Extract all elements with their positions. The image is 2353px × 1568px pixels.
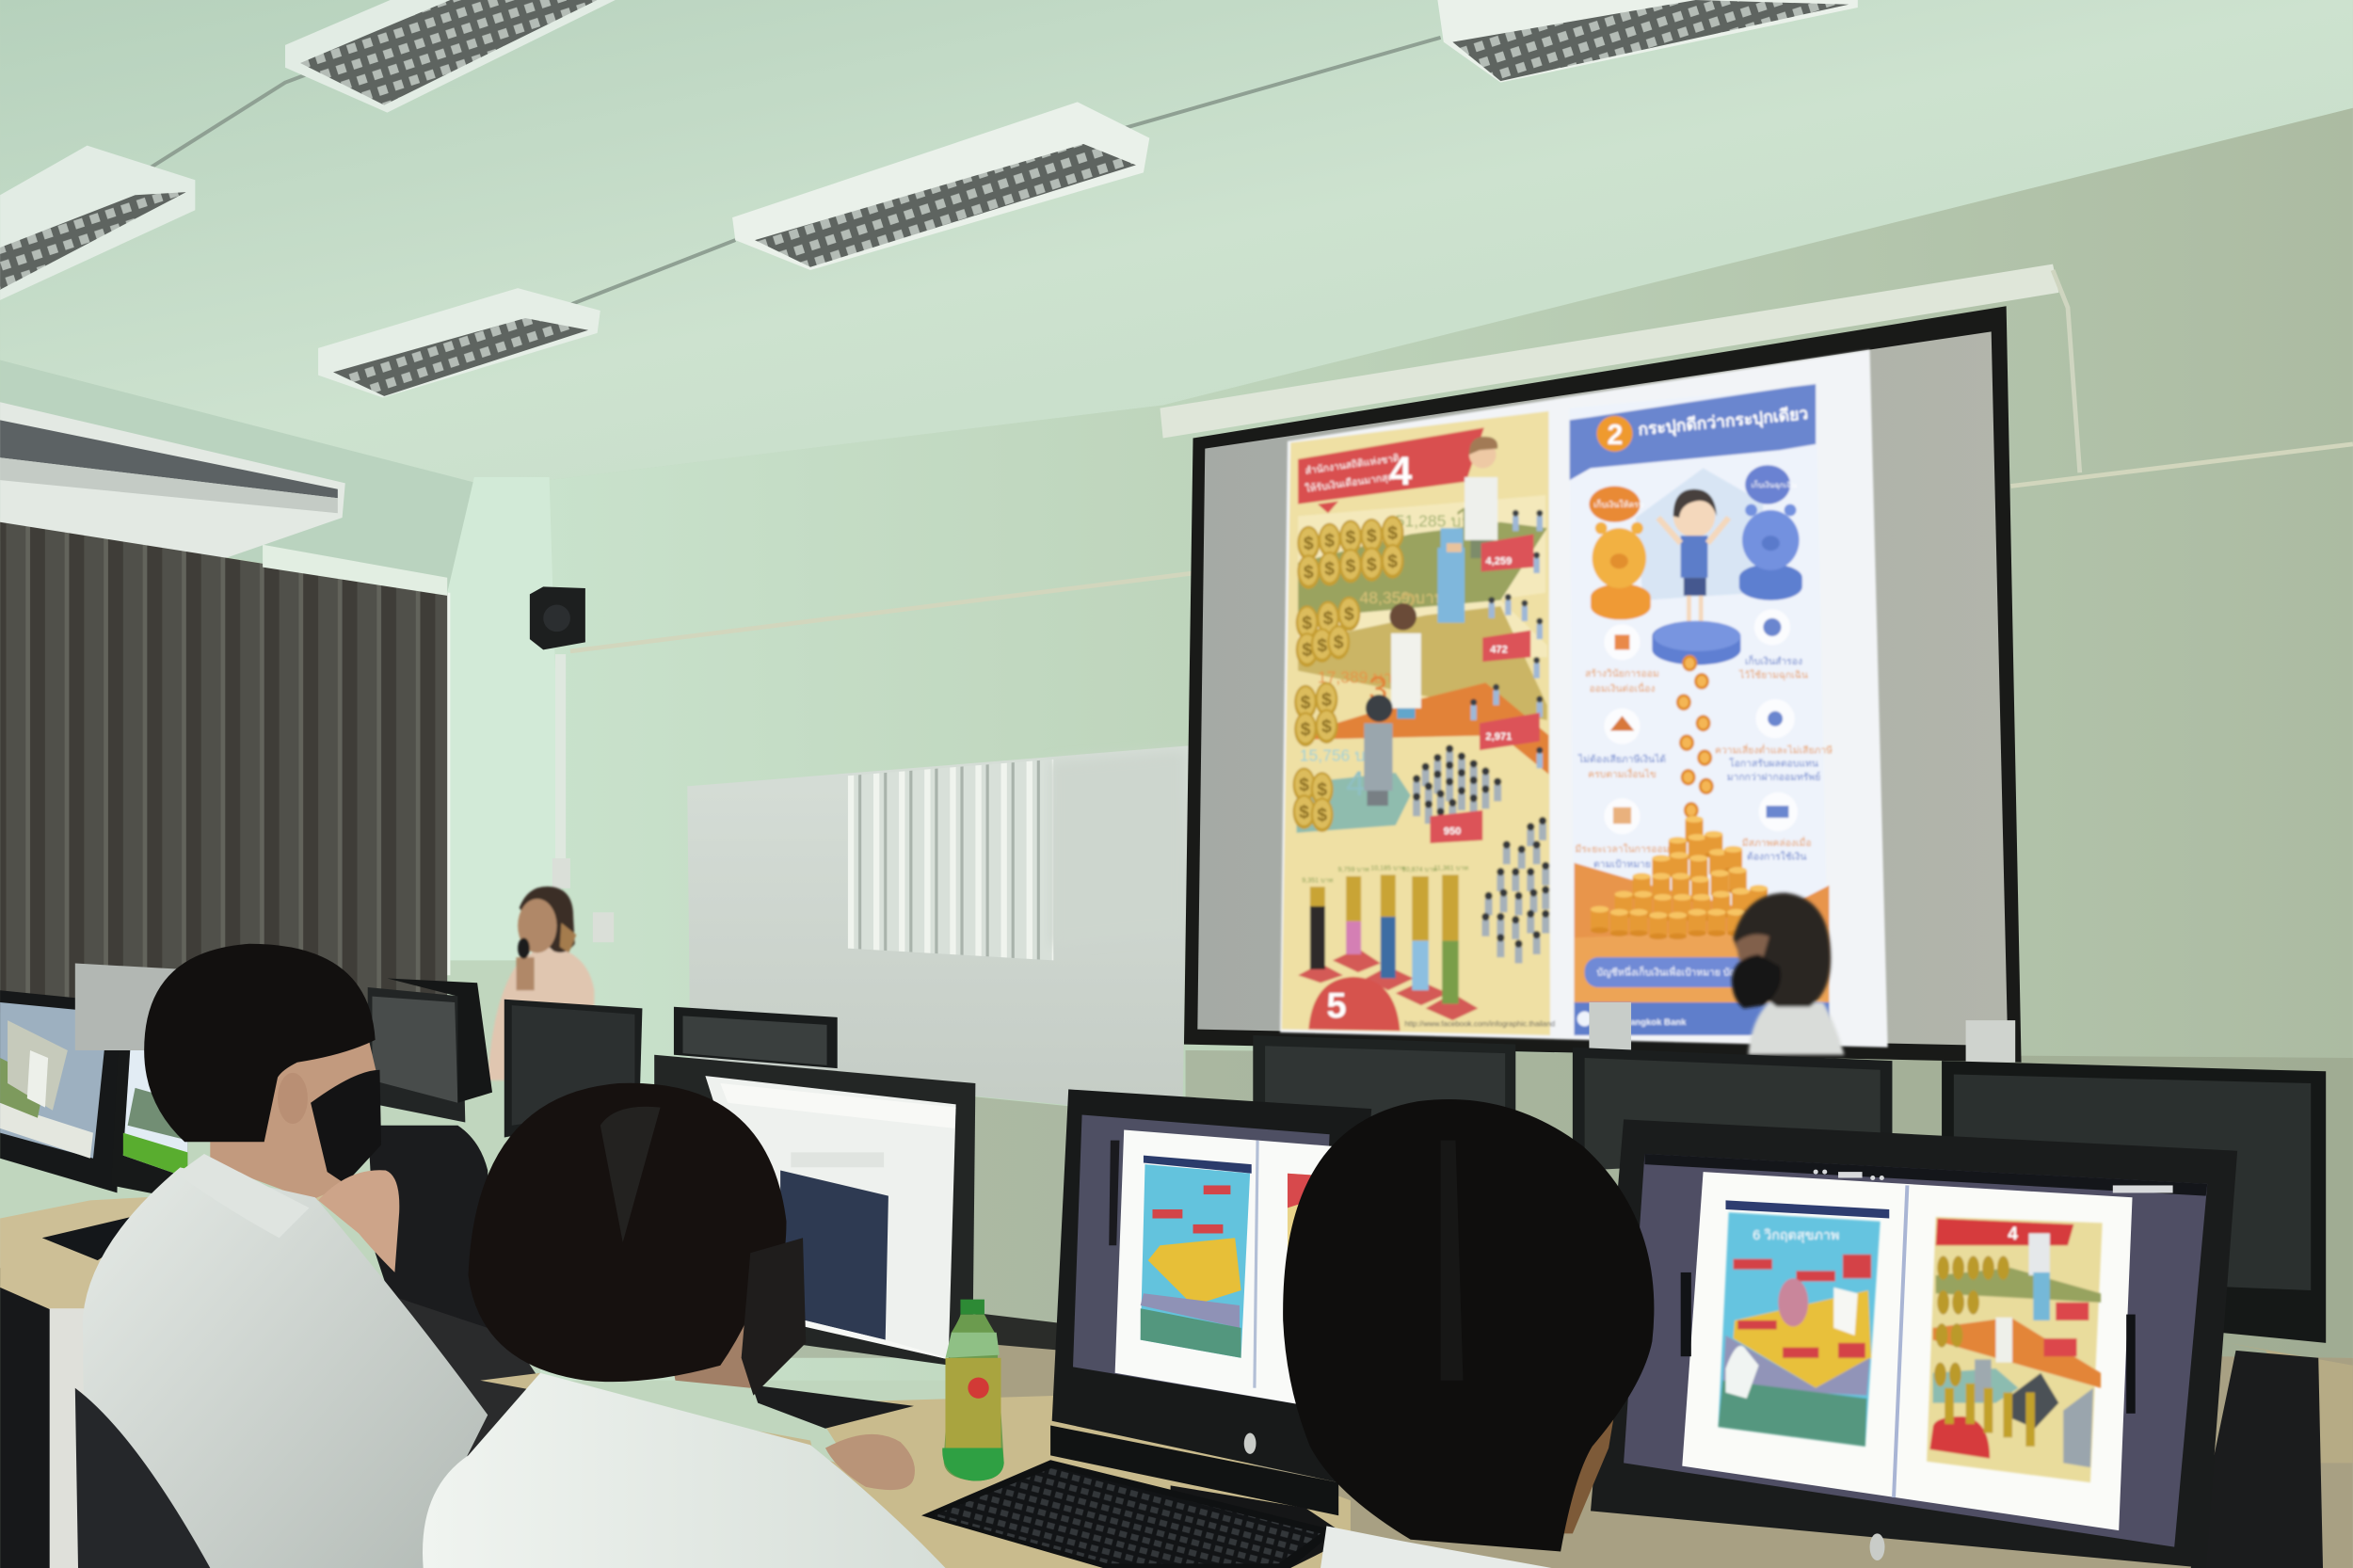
dark chair behind students <box>368 1126 488 1343</box>
yellow band <box>1298 606 1547 720</box>
left monitor with campus photo <box>0 990 120 1192</box>
small figures <box>1470 510 1543 768</box>
blue savings pill <box>1585 957 1817 987</box>
red stat callouts: 950 <box>1444 825 1461 837</box>
slide panel: salary ranking: 4 <box>1346 764 1366 803</box>
benefit icons <box>1604 609 1798 834</box>
foreground desk centre <box>480 1373 960 1568</box>
benefit labels: ต้องการใช้เงิน <box>1747 852 1806 863</box>
ceiling light 5 <box>1437 0 1858 83</box>
lower desk base <box>990 1343 2353 1568</box>
ceiling light 3 <box>732 102 1149 270</box>
girl figure <box>1658 489 1729 623</box>
mask <box>742 1238 806 1396</box>
orange pig on podium <box>1591 522 1651 619</box>
olive band <box>1298 522 1547 618</box>
benefit labels: มีสภาพคล่องเมื่อ <box>1742 836 1812 849</box>
orange band <box>1297 682 1548 775</box>
blue callout <box>1745 465 1798 504</box>
benefit labels: ไม่ต้องเสียภาษีเงินได้ <box>1577 753 1666 765</box>
coin stacks with graduates: 10,185 บาท <box>1370 865 1406 872</box>
suit figure <box>1364 695 1393 806</box>
doctor figure <box>1465 437 1497 558</box>
slide panel: salary ranking: 1 <box>1454 501 1474 541</box>
chair front left <box>75 1388 210 1568</box>
slide panel: salary ranking: ให้รับเงินเดือนมากสุด <box>1305 471 1395 495</box>
slide panel: salary ranking: 3 <box>1369 670 1387 709</box>
ceiling conduits <box>143 38 1441 308</box>
wall conduit <box>552 654 614 942</box>
red stat callouts: 2,971 <box>1485 731 1512 743</box>
standing student <box>1732 893 1844 1055</box>
orange number badge: 2 <box>1608 420 1623 451</box>
slide panel: salary ranking <box>1282 411 1555 1035</box>
orange callout <box>1589 487 1643 522</box>
wall <box>540 108 2353 1381</box>
mid monitor stand <box>1171 1485 1351 1568</box>
benefit labels: มีระยะเวลาในการออม <box>1575 844 1670 856</box>
ceiling light 2 <box>285 0 616 113</box>
red header banner <box>1298 427 1484 504</box>
far monitors near presenter <box>368 978 838 1137</box>
wall speaker <box>530 586 585 649</box>
neck and face <box>210 1035 378 1200</box>
benefit labels: เก็บเงินสำรอง <box>1745 654 1802 667</box>
coin stacks with graduates: 11,361 บาท <box>1433 865 1468 872</box>
benefit labels <box>1575 654 1833 870</box>
bank footer <box>1574 1002 1830 1035</box>
red semicircle with number 5 <box>1308 977 1401 1031</box>
coin stacks with graduates: 9,759 บาท <box>1338 866 1369 873</box>
scattered crowd <box>1481 817 1549 964</box>
projector stand post <box>1589 1002 2015 1063</box>
slide panel: salary ranking: 15,756 บาท <box>1300 745 1385 764</box>
blue callout: เก็บเงินฉุกเฉิน <box>1752 480 1798 489</box>
banner text: สำนักงานสถิติแห่งชาติ <box>1305 453 1400 477</box>
projector screen <box>1184 306 2022 1063</box>
page spread <box>1682 1172 2133 1530</box>
student left <box>83 944 488 1568</box>
collar <box>1321 1526 1552 1568</box>
monitor with two page layout, mid <box>1050 1089 1371 1515</box>
benefit labels: สร้างวินัยการออม <box>1585 668 1659 680</box>
second left monitor <box>111 1008 187 1200</box>
window curtain <box>0 522 447 1013</box>
bank footer: Bangkok Bank <box>1624 1017 1687 1028</box>
floor under centre desk <box>376 1290 540 1470</box>
ear <box>278 1073 308 1124</box>
wall rails <box>570 444 2353 651</box>
benefit labels: ออมเงินต่อเนื่อง <box>1590 681 1655 695</box>
back row monitor right 1 <box>1573 1048 1892 1171</box>
orange ground <box>1574 863 1830 1035</box>
coin stacks with graduates: 10,874 บาท <box>1402 866 1437 873</box>
toolbar dots <box>1814 1170 2173 1192</box>
shirt <box>83 1167 488 1568</box>
coin pile <box>1591 816 1768 939</box>
back row monitor right 2 <box>1942 1061 2326 1343</box>
right desk strip <box>2191 1343 2353 1568</box>
hand <box>318 1170 399 1272</box>
red stat callouts <box>1430 535 1540 843</box>
source line: http://www.facebook.com/infographic.thailand <box>1404 1019 1555 1028</box>
blue pig on podium <box>1739 504 1802 600</box>
navy heading bar <box>1725 1200 1889 1219</box>
ceiling light 1 <box>0 146 195 300</box>
falling coins <box>1676 655 1714 819</box>
teal band <box>1297 773 1411 833</box>
mini poster blue: 6 วิกฤตสุขภาพ <box>1753 1228 1839 1243</box>
red stat callouts: 4,259 <box>1485 555 1512 567</box>
benefit labels: ตามเป้าหมาย <box>1593 858 1651 870</box>
benefit labels: ไว้ใช้ยามฉุกเฉิน <box>1738 669 1808 681</box>
front right monitor <box>1591 1119 2237 1568</box>
student centre <box>423 1083 945 1568</box>
coin stacks with graduates <box>1298 865 1478 1020</box>
lower wall <box>690 1050 2353 1358</box>
hair <box>469 1083 786 1382</box>
blue savings pill: บัญชีหนึ่งเก็บเงินเพื่อเป้าหมาย บัญชีหนึ่งเก็บเงิน <box>1596 965 1792 978</box>
big number 4: 4 <box>1389 449 1412 494</box>
coin rows <box>1293 516 1404 832</box>
salary numbers: 51,285 บาท <box>1396 512 1481 531</box>
back row monitor centre <box>1253 1035 1515 1118</box>
hair <box>1283 1099 1654 1551</box>
neck <box>661 1260 788 1388</box>
slide panel: salary ranking: 17,389 บาท <box>1318 667 1403 686</box>
left desk <box>0 1185 360 1568</box>
side arrows <box>1681 1272 2136 1414</box>
slide panel: salary ranking: 48,359 บาท <box>1359 588 1445 607</box>
red semicircle with number 5: 5 <box>1326 985 1347 1026</box>
benefit labels: ครบตามเงื่อนไข <box>1588 767 1657 780</box>
bottle <box>942 1300 1004 1481</box>
benefit labels: โอกาสรับผลตอบแทน <box>1729 758 1818 770</box>
benefit labels: ความเสี่ยงต่ำและไม่เสียภาษี <box>1715 743 1833 756</box>
orange number badge <box>1596 416 1633 452</box>
keyboard <box>921 1460 1336 1568</box>
orange callout: เก็บเงินให้ครบ <box>1593 499 1643 509</box>
graduate crowd <box>1413 744 1501 831</box>
hair <box>144 944 376 1142</box>
skin <box>1545 1358 1624 1533</box>
student right <box>1283 1099 1654 1568</box>
shirt <box>423 1373 945 1568</box>
mini poster salaries: 4 <box>2008 1224 2018 1244</box>
hand on mouse <box>825 1434 915 1490</box>
air conditioner <box>0 402 345 558</box>
projector screen housing <box>1160 264 2080 472</box>
left side wall and column <box>0 360 565 975</box>
centre monitor with browser <box>654 1055 975 1368</box>
ceiling <box>0 0 2353 483</box>
collar <box>177 1154 310 1238</box>
projected slide <box>1280 349 1888 1048</box>
slide panel: salary ranking: 2 <box>1399 587 1417 624</box>
mini poster blue <box>1719 1212 1881 1447</box>
mini poster salaries <box>1927 1217 2103 1482</box>
slide panel: two buckets <box>1570 384 1833 1035</box>
banner title: กระปุกดีกว่ากระปุกเดียว <box>1637 404 1809 440</box>
building background <box>1636 468 1763 600</box>
back grey cabinet <box>75 964 184 1050</box>
red stat callouts: 472 <box>1490 645 1508 656</box>
coin stacks with graduates: 9,351 บาท <box>1302 876 1334 884</box>
central platform <box>1652 621 1740 665</box>
mask <box>311 1070 381 1184</box>
presenter <box>488 887 594 1080</box>
dark doctor figure <box>1389 603 1421 719</box>
HP logo <box>1870 1533 1884 1560</box>
surgeon figure <box>1437 528 1465 623</box>
dark area under left desk <box>0 1268 105 1568</box>
lower wall skirting <box>975 1313 1063 1351</box>
whiteboard <box>687 745 1189 1116</box>
benefit labels: มากกว่าฝากออมทรัพย์ <box>1727 771 1820 783</box>
centre monitor stand <box>752 1385 914 1429</box>
blue title banner <box>1570 384 1816 480</box>
ceiling light 4 <box>318 288 600 397</box>
